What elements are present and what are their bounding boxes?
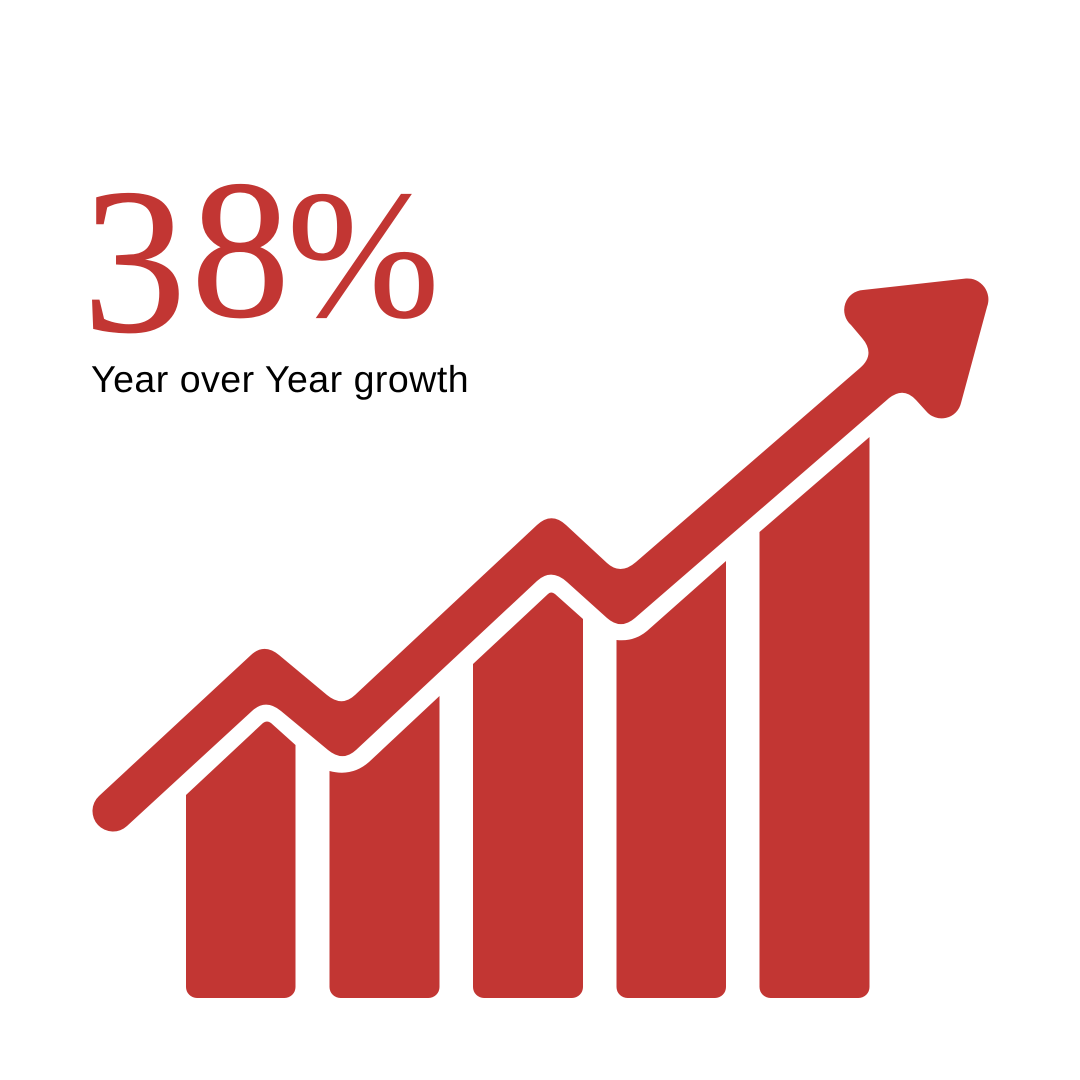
caption: Year over Year growth: Year over Year growth bbox=[91, 358, 469, 400]
icon: rising growth arrow bbox=[92, 278, 988, 832]
bar 4 bbox=[616, 561, 726, 998]
bar 2 bbox=[330, 696, 440, 998]
headline statistic: 38%: 8 bbox=[191, 140, 290, 359]
headline statistic: 38%: % bbox=[287, 153, 439, 356]
bar 3 bbox=[473, 592, 583, 998]
bar 1 bbox=[186, 722, 296, 998]
bar 5 bbox=[760, 437, 870, 998]
headline statistic: 38%: 3 bbox=[82, 146, 186, 376]
bar chart: five ascending bars bbox=[186, 437, 870, 998]
